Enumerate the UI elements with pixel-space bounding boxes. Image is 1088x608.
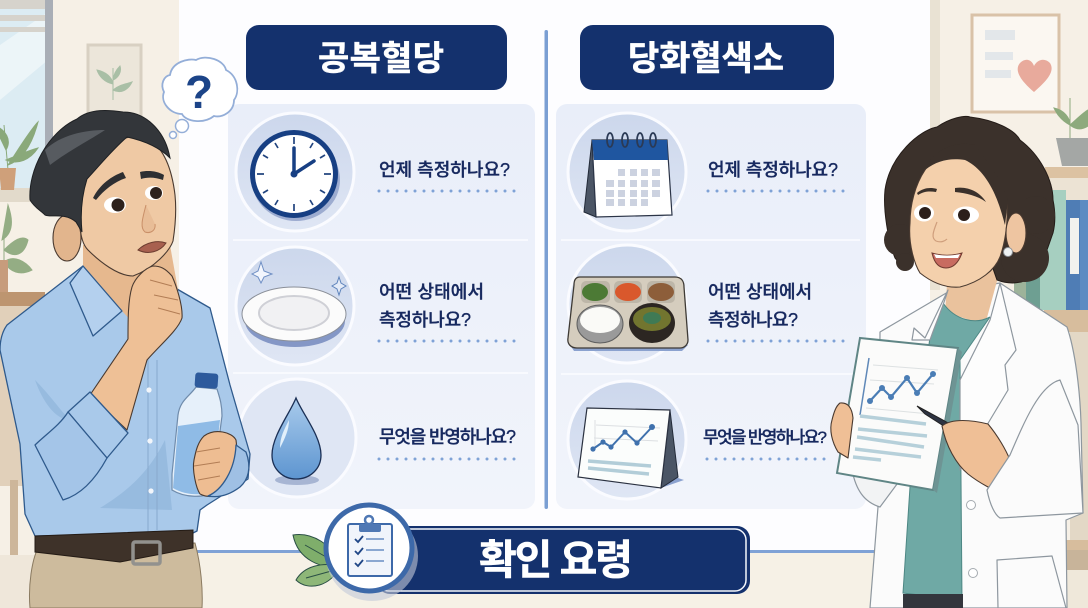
shirt cuff <box>208 445 249 497</box>
neck <box>945 270 1000 325</box>
lab coat lapels <box>912 283 1016 470</box>
panel: HbA1c <box>556 104 866 509</box>
center divider line <box>544 30 548 509</box>
buttons <box>146 387 154 494</box>
scrub top <box>903 303 990 600</box>
dark trousers <box>903 594 963 608</box>
banner text: 확인 요령 <box>479 537 633 583</box>
icon: clock <box>236 113 354 231</box>
rolled sleeve <box>68 392 128 458</box>
icon: calendar <box>568 113 686 231</box>
hand holding bottle <box>193 432 237 496</box>
hair highlight <box>45 130 105 165</box>
question text <box>379 282 484 330</box>
character: man <box>0 110 250 608</box>
button placket <box>148 360 157 535</box>
ear <box>1006 213 1026 253</box>
question text: 어떤 상태에서 <box>379 282 484 302</box>
row: when measured, calendar <box>568 113 844 231</box>
row: state measured, plate <box>236 247 516 365</box>
right hand and pen <box>917 406 1010 495</box>
mouth <box>932 253 962 268</box>
coat sleeve <box>987 380 1083 518</box>
eyes <box>104 186 163 213</box>
belt <box>35 530 193 564</box>
mouth <box>138 242 166 252</box>
right room background <box>922 0 1088 608</box>
nose <box>142 205 155 233</box>
question text: 무엇을 반영하나요? <box>703 428 827 447</box>
icon: clipboard badge <box>326 505 418 601</box>
icon: chart card <box>568 381 686 499</box>
heading: fasting glucose: 공복혈당 <box>318 40 444 78</box>
question text: 무엇을 반영하나요? <box>379 427 516 447</box>
hair front <box>925 144 1008 225</box>
left fingers <box>831 403 853 458</box>
dotted rule <box>379 458 516 460</box>
hair back <box>884 116 1055 283</box>
question text: 언제 측정하나요? <box>379 160 510 180</box>
coat buttons <box>966 500 978 578</box>
icon: empty plate <box>236 247 354 365</box>
earring <box>1004 248 1012 256</box>
question text: 어떤 상태에서 <box>708 282 812 302</box>
eyebrows <box>917 188 986 202</box>
dotted rule <box>708 340 844 342</box>
heading: HbA1c <box>580 25 834 90</box>
panel: fasting glucose <box>228 104 535 509</box>
nose <box>933 222 947 242</box>
question text: 측정하나요? <box>379 310 471 330</box>
heading: HbA1c: 당화혈색소 <box>628 40 784 78</box>
icon: leaves <box>293 535 342 586</box>
row: state measured, meal tray <box>568 245 844 363</box>
shirt <box>0 266 250 536</box>
row: what reflected, chart <box>568 381 828 499</box>
question text <box>708 282 812 330</box>
eyebrows <box>93 171 164 200</box>
ear <box>53 215 81 261</box>
trousers <box>29 543 202 608</box>
shirt shading <box>35 380 172 510</box>
icon: meal tray <box>568 245 688 363</box>
dotted rule <box>379 190 516 192</box>
row: what reflected, water drop <box>238 379 516 497</box>
thought bubble with question mark <box>162 58 237 138</box>
water bottle <box>172 372 222 496</box>
coat pocket <box>997 556 1066 608</box>
dotted rule <box>379 340 516 342</box>
row: when measured, clock <box>236 113 516 231</box>
raised forearm and hand <box>90 266 182 430</box>
head <box>80 137 176 276</box>
left room background <box>0 0 180 608</box>
clipboard with chart <box>837 338 962 493</box>
white board background <box>179 0 930 608</box>
character: doctor <box>831 116 1083 608</box>
eyes <box>914 204 979 224</box>
left sleeve behind board <box>852 465 900 507</box>
shirt collar <box>70 266 122 336</box>
banner: check guide <box>293 505 750 601</box>
bent elbow <box>35 412 107 500</box>
question text: 측정하나요? <box>708 310 798 330</box>
face <box>910 158 1007 287</box>
hair <box>30 110 170 232</box>
dotted rule <box>707 458 828 460</box>
heading: fasting glucose <box>246 25 507 90</box>
thought bubble with question mark: ? <box>185 66 213 118</box>
lab coat <box>870 283 1083 608</box>
neck <box>83 245 178 325</box>
question text: 언제 측정하나요? <box>708 160 838 180</box>
icon: water drop <box>238 379 356 497</box>
dotted rule <box>708 190 844 192</box>
banner bar <box>377 526 750 594</box>
